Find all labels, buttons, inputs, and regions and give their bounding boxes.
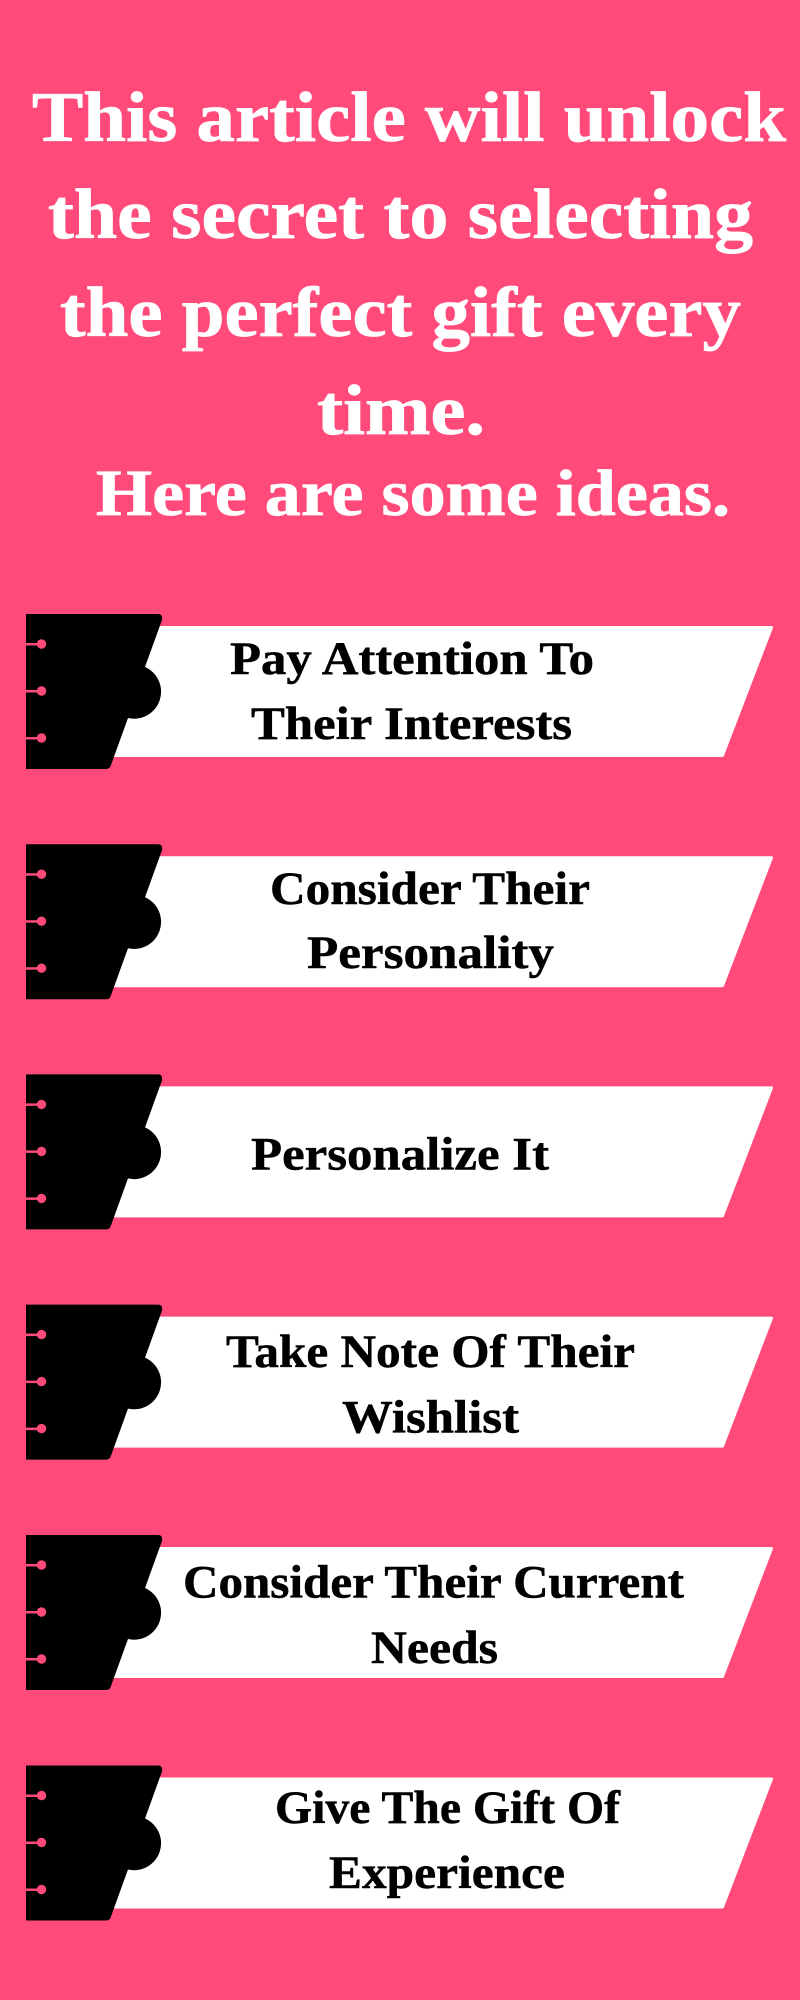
banner 3 <box>100 1088 772 1216</box>
label 4: Take Note Of Their <box>226 1326 635 1378</box>
notebook icon 6 <box>26 1766 162 1920</box>
title: the perfect gift every <box>60 274 741 352</box>
item 2: consider their personality <box>26 844 772 999</box>
notebook icon 5 <box>26 1535 162 1690</box>
label 1: Pay Attention To <box>230 633 594 685</box>
title: This article will unlock <box>32 79 787 157</box>
label 1 <box>230 633 594 750</box>
item 3: personalize it <box>26 1074 772 1229</box>
label 6: Give The Gift Of <box>275 1782 621 1834</box>
notebook icon 2 <box>26 844 162 999</box>
item 1: pay attention to their interests <box>26 614 772 769</box>
banner 6 <box>100 1779 772 1907</box>
title <box>32 79 787 450</box>
notebook icon 3 <box>26 1074 162 1229</box>
item 4: take note of their wishlist <box>26 1305 772 1460</box>
banner 4 <box>100 1318 772 1446</box>
label 2: Personality <box>307 927 555 979</box>
label 6 <box>275 1782 621 1899</box>
subtitle: Here are some ideas. <box>96 457 730 530</box>
item 5: consider their current needs <box>26 1535 772 1690</box>
label 5: Needs <box>371 1622 498 1674</box>
label 4: Wishlist <box>342 1392 519 1444</box>
label 1: Their Interests <box>251 698 572 750</box>
label 5 <box>183 1556 684 1674</box>
title: time. <box>317 372 485 450</box>
label 4 <box>226 1326 635 1444</box>
label 5: Consider Their Current <box>183 1556 684 1608</box>
banner 5 <box>100 1548 772 1676</box>
title: the secret to selecting <box>48 176 753 254</box>
label 2 <box>270 863 590 979</box>
label 6: Experience <box>329 1847 565 1899</box>
banner 1 <box>100 628 772 756</box>
label 3: Personalize It <box>251 1128 549 1180</box>
banner 2 <box>100 858 772 986</box>
item 6: give the gift of experience <box>26 1766 772 1920</box>
label 2: Consider Their <box>270 863 590 915</box>
notebook icon 4 <box>26 1305 162 1460</box>
notebook icon 1 <box>26 614 162 769</box>
